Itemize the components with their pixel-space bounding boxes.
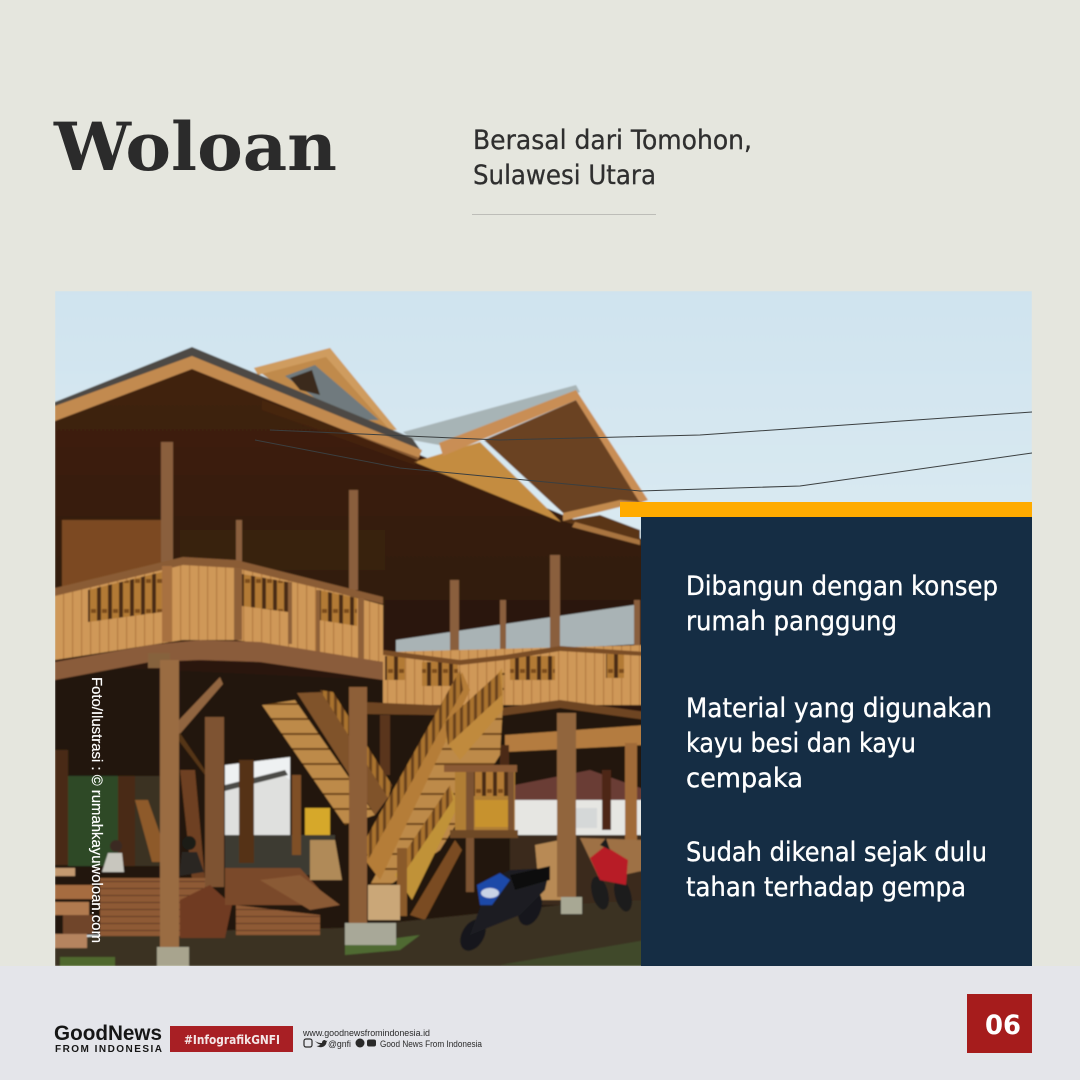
- motorcycle red: [590, 838, 632, 912]
- subtitle: Berasal dari Tomohon,: [473, 125, 752, 156]
- website and social handles: @gnfi: [328, 1039, 351, 1049]
- point 1: rumah panggung: [686, 606, 897, 637]
- point 3: tahan terhadap gempa: [686, 872, 966, 903]
- info panel: [641, 517, 1032, 966]
- point 2: Material yang digunakan: [686, 693, 992, 724]
- website and social handles: www.goodnewsfromindonesia.id: [302, 1028, 430, 1038]
- stair landing: [444, 765, 518, 892]
- main staircases: [365, 668, 505, 920]
- icon: twitter: [315, 1040, 328, 1047]
- upper wall panels: [61, 519, 604, 628]
- photo: wooden stilt house: [55, 291, 1032, 966]
- lower dark undercroft: [55, 665, 646, 935]
- subtitle rule: [472, 214, 656, 215]
- title: Woloan: [53, 108, 337, 186]
- left staircase: [262, 690, 392, 825]
- sky: [55, 291, 1032, 966]
- power lines: [255, 412, 1032, 491]
- subtitle: Sulawesi Utara: [473, 160, 656, 191]
- upper balcony left: [55, 557, 383, 680]
- point 2: [686, 693, 992, 794]
- photo credit: Foto/Ilustrasi : © rumahkayuwoloan.com: [88, 677, 104, 943]
- GoodNews logo: [54, 1022, 162, 1055]
- point 2: cempaka: [686, 763, 803, 794]
- point 3: Sudah dikenal sejak dulu: [686, 837, 987, 868]
- back gable roof: [254, 348, 397, 430]
- under-balcony lower pillars: [55, 677, 637, 887]
- back beam and lower panel: [505, 725, 646, 752]
- background tree: [68, 776, 118, 866]
- page number badge: 06: [985, 1010, 1021, 1041]
- white background building: [225, 757, 646, 905]
- icon: instagram: [304, 1039, 312, 1047]
- website and social handles: [302, 1028, 482, 1049]
- distant grey roof: [396, 604, 640, 658]
- point 2: kayu besi dan kayu: [686, 728, 916, 759]
- ground: [55, 900, 646, 966]
- hashtag badge: [170, 1026, 293, 1052]
- upper pillars: [161, 442, 640, 662]
- hashtag badge: #InfografikGNFI: [184, 1032, 280, 1047]
- workers: [102, 836, 204, 876]
- icon: facebook: [356, 1038, 364, 1048]
- page number badge: [967, 994, 1032, 1053]
- orange accent bar: [620, 502, 1032, 517]
- footer band: [0, 966, 1080, 1080]
- motorcycle blue: [455, 866, 550, 955]
- right gable: [403, 385, 648, 545]
- second floor balcony right: [362, 645, 646, 720]
- GoodNews logo: FROM INDONESIA: [55, 1044, 162, 1055]
- lumber stacks: [55, 838, 646, 948]
- point 1: Dibangun dengan konsep: [686, 571, 998, 602]
- point 3: [686, 837, 987, 903]
- GoodNews logo: GoodNews: [54, 1022, 162, 1045]
- website and social handles: Good News From Indonesia: [380, 1039, 482, 1049]
- building dark interior: [55, 368, 641, 713]
- main lower pillars: [148, 653, 582, 966]
- main roof: [55, 347, 422, 465]
- point 1: [686, 571, 998, 637]
- icon: youtube: [367, 1040, 376, 1046]
- subtitle: [473, 125, 752, 191]
